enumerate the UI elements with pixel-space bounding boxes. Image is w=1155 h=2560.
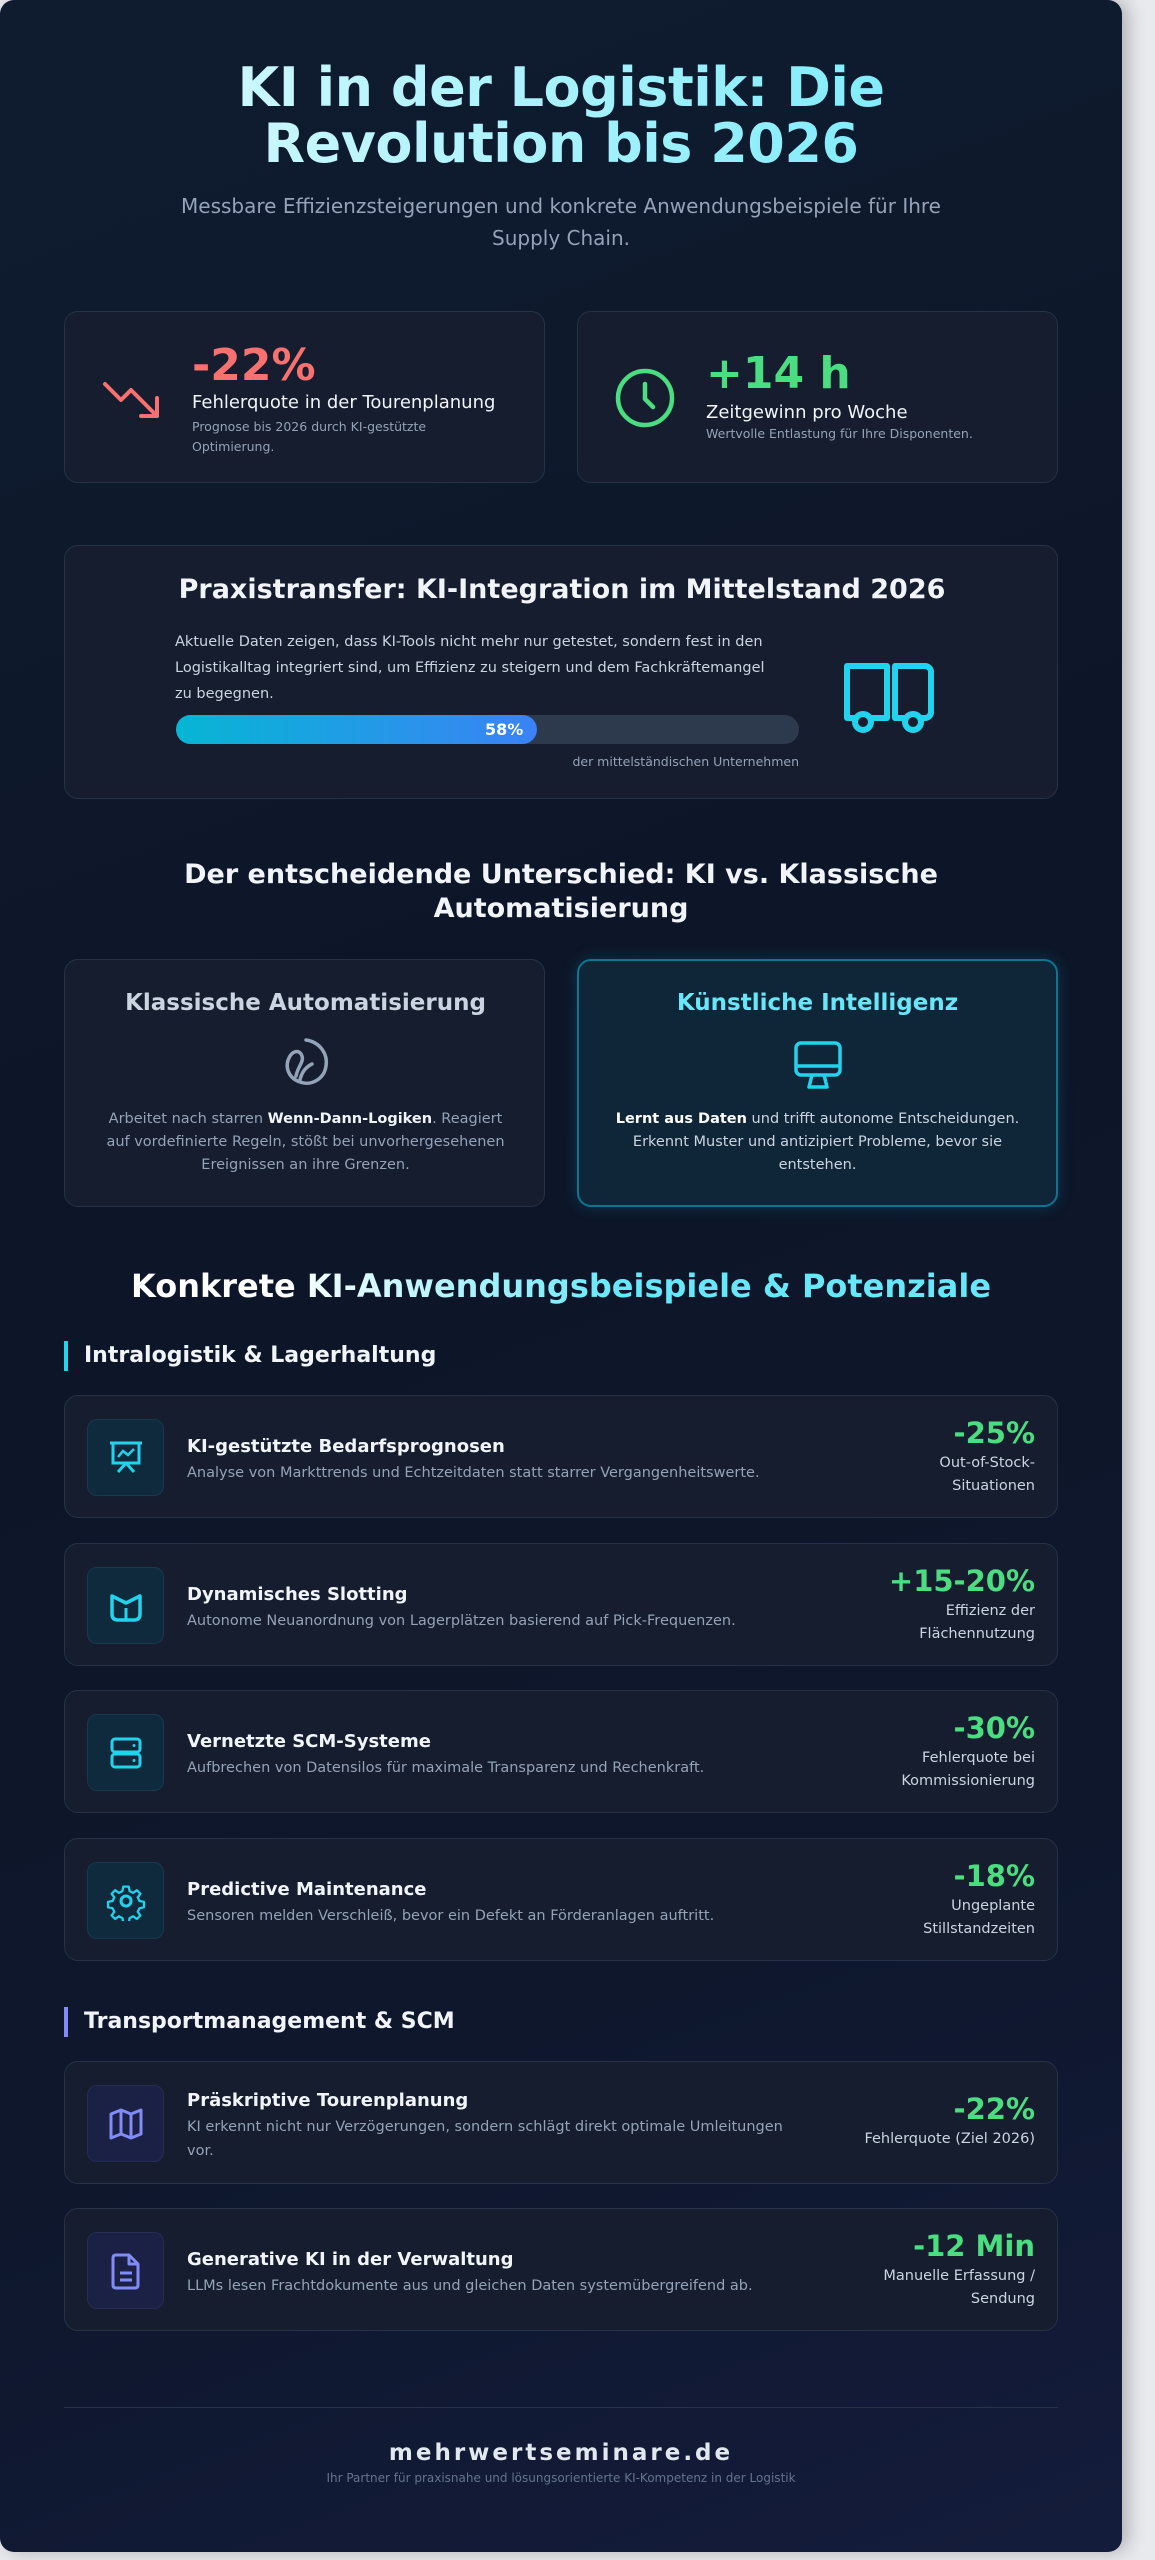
icon: document [87,2232,164,2309]
stat card: time gain [577,311,1058,483]
row: Tourenplanung [64,2061,1058,2184]
row: Generative KI: Sendung [971,2291,1035,2307]
row: Tourenplanung: KI erkennt nicht nur Verzögerungen, sondern schlägt direkt optimale Umleitungen vor. [187,2119,783,2159]
card text: Lernt aus Daten und trifft autonome Entscheidungen. Erkennt Muster und antizipiert Probleme, bevor sie entstehen. [616,1111,1019,1173]
icon: gear [87,1862,164,1939]
row: Slotting: Dynamisches Slotting [187,1584,408,1605]
footer: Ihr Partner für praxisnahe und lösungsorientierte KI-Kompetenz in der Logistik [326,2471,796,2485]
row: Predictive Maintenance: Ungeplante [951,1898,1035,1914]
row: Generative KI: LLMs lesen Frachtdokumente aus und gleichen Daten systemübergreifend ab. [187,2278,753,2294]
stat note: Prognose bis 2026 durch KI-gestützte Optimierung. [192,419,426,454]
row: Tourenplanung: Präskriptive Tourenplanung [187,2090,468,2111]
row: Predictive Maintenance [64,1838,1058,1961]
card title: Künstliche Intelligenz [677,990,958,1016]
value: -22% [954,2092,1035,2126]
footer [326,2440,796,2485]
subheading: transport: Transportmanagement & SCM [84,2009,455,2034]
card title: Klassische Automatisierung [125,990,486,1016]
row: Bedarfsprognosen: Situationen [952,1478,1035,1494]
icon: box [87,1567,164,1644]
bar caption: der mittelständischen Unternehmen [572,754,799,769]
row: Predictive Maintenance: Sensoren melden Verschleiß, bevor ein Defekt an Förderanlagen auftritt. [187,1908,714,1924]
row: SCM-Systeme: Fehlerquote bei [922,1750,1035,1766]
icon: server [87,1714,164,1791]
stat label: Zeitgewinn pro Woche [706,402,908,423]
stat card: error rate [64,311,545,483]
row: SCM-Systeme [64,1690,1058,1813]
heading: Praxistransfer: KI-Integration im Mittelstand 2026 [179,574,945,605]
panel: AI [577,959,1058,1207]
icon: monitor [794,1041,842,1089]
row: Slotting: Effizienz der [946,1603,1035,1619]
subtitle: Messbare Effizienzsteigerungen und konkrete Anwendungsbeispiele für Ihre Supply Chain. [181,194,941,250]
row: Bedarfsprognosen: Analyse von Markttrends und Echtzeitdaten statt starrer Vergangenheitswerte. [187,1465,760,1481]
title [0,60,1122,172]
icon: map [87,2085,164,2162]
row: Predictive Maintenance: Stillstandzeiten [923,1921,1035,1937]
value: -18% [954,1859,1035,1893]
row: Bedarfsprognosen: KI-gestützte Bedarfsprognosen [187,1436,505,1457]
icon: leaf [285,1038,328,1085]
icon: presentation chart [87,1419,164,1496]
row: Bedarfsprognosen: Out-of-Stock- [939,1455,1035,1471]
icon: trend down [102,382,160,418]
row: Slotting: Flächennutzung [919,1626,1035,1642]
row: Predictive Maintenance: Predictive Maintenance [187,1879,426,1900]
title: Revolution bis 2026 [263,112,859,175]
progress bar: 58% [485,720,523,739]
stat value: +14 h [706,348,851,399]
row: SCM-Systeme: Kommissionierung [901,1773,1035,1789]
row: Generative KI: Manuelle Erfassung / [883,2268,1035,2284]
row: Slotting: Autonome Neuanordnung von Lagerplätzen basierend auf Pick-Frequenzen. [187,1613,736,1629]
row: SCM-Systeme: Vernetzte SCM-Systeme [187,1731,431,1752]
row: Generative KI: Generative KI in der Verwaltung [187,2249,514,2270]
panel: classic automation [64,959,545,1207]
title: KI in der Logistik: Die [237,56,885,119]
row: Generative KI [64,2208,1058,2331]
stat value: -22% [192,340,316,391]
heading: difference: Der entscheidende Unterschied: KI vs. Klassische Automatisierung [184,859,938,924]
stat note: Wertvolle Entlastung für Ihre Disponenten. [706,426,973,441]
value: -30% [954,1711,1035,1745]
row: Slotting [64,1543,1058,1666]
value: -25% [954,1416,1035,1450]
row: SCM-Systeme: Aufbrechen von Datensilos für maximale Transparenz und Rechenkraft. [187,1760,704,1776]
card text: Arbeitet nach starren Wenn-Dann-Logiken. Reagiert auf vordefinierte Regeln, stößt bei unvorhergesehenen Ereignissen an ihre Grenzen. [106,1111,505,1173]
row: Bedarfsprognosen [64,1395,1058,1518]
progress bar [176,715,799,744]
value: -12 Min [913,2229,1035,2263]
stat label: Fehlerquote in der Tourenplanung [192,392,495,413]
heading: use cases: Konkrete KI-Anwendungsbeispiele & Potenziale [131,1267,991,1305]
subheading: intralogistics: Intralogistik & Lagerhaltung [84,1343,436,1368]
paragraph: Aktuelle Daten zeigen, dass KI-Tools nicht mehr nur getestet, sondern fest in den Logistikalltag integriert sind, um Effizienz zu steigern und dem Fachkräftemangel zu begegnen. [175,634,765,702]
footer: mehrwertseminare.de [389,2440,733,2466]
icon: truck [844,663,934,733]
value: +15-20% [889,1564,1035,1598]
panel: Praxistransfer [64,545,1058,799]
icon: clock [616,368,674,428]
row: Tourenplanung: Fehlerquote (Ziel 2026) [864,2131,1035,2147]
